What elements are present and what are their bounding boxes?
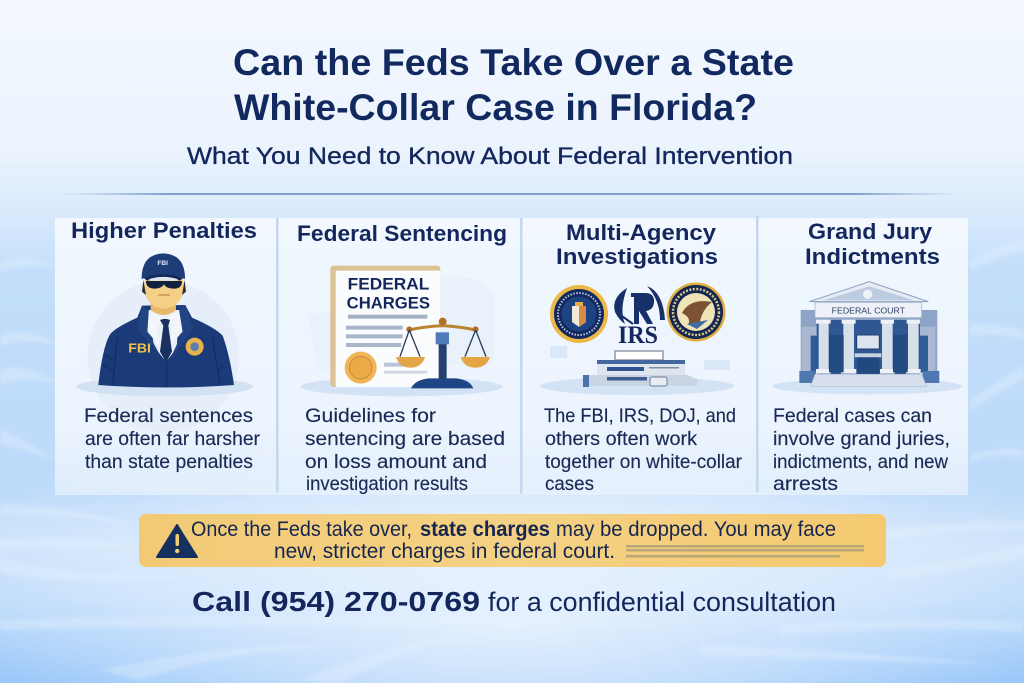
text: higher penalties: than state penalties <box>85 451 253 473</box>
icon: charges document and scales <box>301 266 503 396</box>
text: federal sentencing: sentencing are based <box>305 428 505 450</box>
panel: content card <box>55 216 968 495</box>
call to action: for a confidential consultation <box>488 587 836 617</box>
callout: warning banner <box>139 514 886 567</box>
title: White-Collar Case in Florida? <box>234 87 757 128</box>
icon: IRS logo: IRS <box>618 322 658 349</box>
panel: multi-agency investigations <box>540 220 742 495</box>
text: higher penalties: are often far harsher <box>85 428 260 450</box>
title <box>233 42 794 128</box>
text: higher penalties: Federal sentences <box>84 405 253 427</box>
icon: charges document and scales: FEDERAL <box>348 276 429 294</box>
icon: FBI agent: FBI <box>128 340 151 355</box>
text: grand jury indictments: involve grand juries, <box>773 428 950 450</box>
icon: federal court building <box>772 282 962 394</box>
text: multi-agency investigations: together on white-collar <box>545 451 742 473</box>
text: grand jury indictments: Federal cases can <box>773 405 932 427</box>
heading: federal sentencing: Federal Sentencing <box>297 221 507 246</box>
call to action <box>192 586 836 617</box>
banner text: state charges <box>420 518 550 541</box>
text: federal sentencing: on loss amount and <box>305 451 487 473</box>
heading: multi-agency investigations: Investigations <box>556 244 718 269</box>
heading: multi-agency investigations <box>556 220 718 269</box>
header rule <box>60 193 960 195</box>
panel: federal sentencing <box>297 221 507 495</box>
icon: DOJ seal <box>666 282 726 342</box>
icon: FBI seal <box>550 285 608 343</box>
icon: federal court building: FEDERAL COURT <box>832 306 905 316</box>
heading: grand jury indictments <box>805 219 940 269</box>
text: federal sentencing: Guidelines for <box>305 405 437 427</box>
heading: higher penalties: Higher Penalties <box>71 218 257 243</box>
icon: FBI agent <box>76 253 254 433</box>
icon: charges document and scales: CHARGES <box>347 294 430 312</box>
call to action: Call (954) 270-0769 <box>192 586 480 617</box>
banner text: Once the Feds take over, <box>191 518 412 541</box>
banner text: new, stricter charges in federal court. <box>274 540 615 563</box>
heading: multi-agency investigations: Multi-Agency <box>566 220 717 245</box>
text: multi-agency investigations <box>544 405 742 495</box>
text: federal sentencing <box>305 405 505 495</box>
text: higher penalties <box>84 405 260 473</box>
text: federal sentencing: investigation results <box>306 473 468 495</box>
text: multi-agency investigations: others often work <box>545 428 697 450</box>
text: multi-agency investigations: The FBI, IRS, DOJ, and <box>544 405 736 427</box>
icon: IRS logo <box>614 286 665 349</box>
heading: grand jury indictments: Grand Jury <box>808 219 932 244</box>
subtitle: What You Need to Know About Federal Intervention <box>187 143 793 170</box>
text: grand jury indictments <box>773 405 950 495</box>
banner text <box>191 518 836 563</box>
icon: agency seals and files <box>540 282 734 395</box>
panel: higher penalties <box>71 218 260 473</box>
icon: FBI agent: FBI <box>157 260 168 267</box>
panel: grand jury indictments <box>772 219 962 495</box>
heading: grand jury indictments: Indictments <box>805 244 940 269</box>
icon: warning triangle <box>157 525 197 557</box>
text: grand jury indictments: arrests <box>773 473 838 495</box>
text: grand jury indictments: indictments, and new <box>773 451 949 473</box>
icon: stack of files <box>583 351 697 387</box>
text: multi-agency investigations: cases <box>545 473 594 495</box>
title: Can the Feds Take Over a State <box>233 42 794 83</box>
banner text: may be dropped. You may face <box>556 518 836 541</box>
